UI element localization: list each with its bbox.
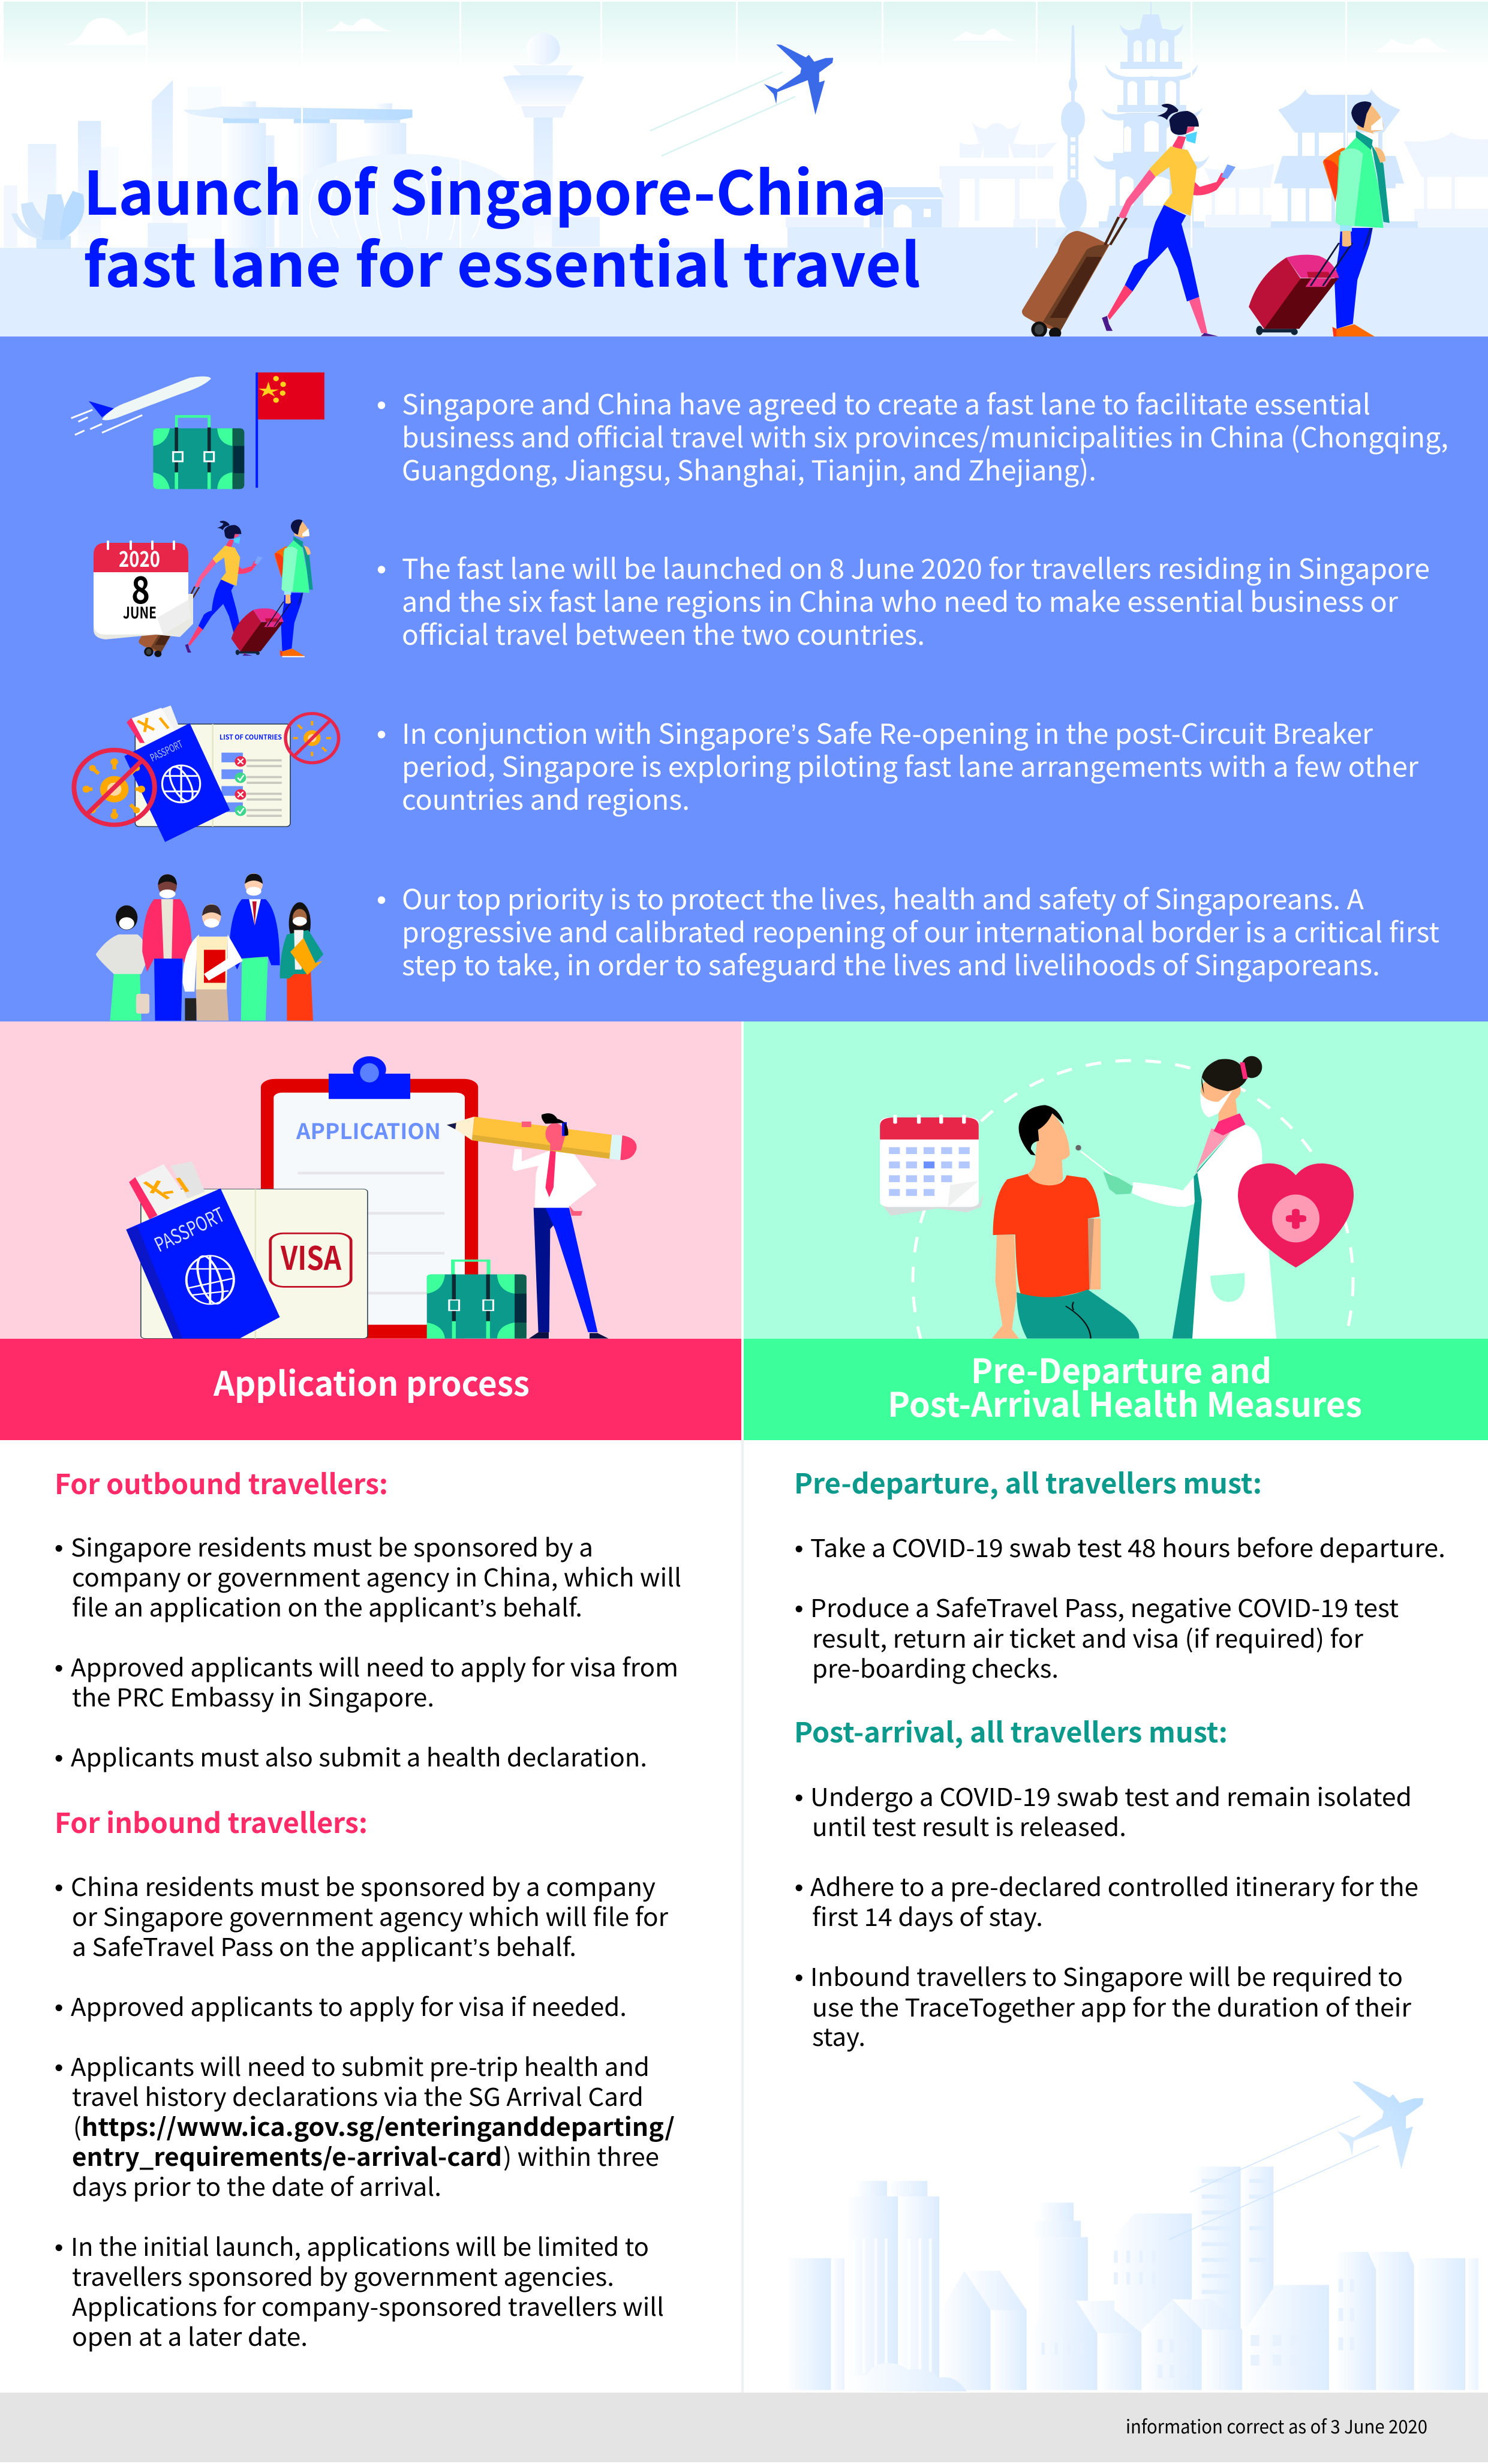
text: key point bullets: • [377,884,386,915]
inbound bullets: China residents must be sponsored by a company [71,1867,656,1903]
panel: application illustration: PASSPORT [149,1199,229,1258]
china skyline [786,0,1488,246]
outbound bullets: • [55,1744,63,1772]
title [83,145,921,304]
text: key point bullets: business and official travel with six provinces/municipalities in China (Chongqing, [402,416,1448,456]
inbound bullets: or Singapore government agency which will file for [72,1897,668,1933]
heading: Application process: Application process [213,1357,530,1406]
post-arrival bullets [795,1777,1418,2053]
faded city skyline with plane [784,2081,1478,2391]
header panel [0,0,1488,339]
post-arrival bullets: first 14 days of stay. [812,1897,1043,1933]
subheading: inbound: For inbound travellers: [55,1802,368,1841]
inbound bullets: days prior to the date of arrival. [72,2167,441,2203]
inbound bullets: • [55,1874,63,1901]
icon: calendar 8 June 2020 with travellers: JUNE [123,601,157,623]
outbound bullets: • [55,1534,63,1562]
pre-departure bullets: • [795,1535,803,1562]
text: key point bullets: period, Singapore is exploring piloting fast lane arrangements with a few other [402,746,1418,785]
heading: Pre-Departure and Post-Arrival Health Measures: Pre-Departure and [971,1345,1271,1393]
outbound bullets: Applicants must also submit a health declaration. [71,1738,647,1774]
icon: blue plane [650,44,833,156]
inbound bullets: travellers sponsored by government agencies. [72,2257,614,2293]
inbound bullets: • [55,2054,63,2081]
text: application process left column [55,1463,681,2353]
inbound bullets [55,1867,675,2353]
heading: Application process [0,1339,741,1440]
text: key point bullets [377,383,1448,984]
text: key point bullets: official travel between the two countries. [402,614,925,653]
title: Launch of Singapore-China [83,145,887,232]
clouds [62,18,1452,52]
post-arrival bullets: stay. [812,2017,865,2053]
icon: plane, suitcase and China flag [71,372,324,489]
post-arrival bullets: use the TraceTogether app for the duration of their [812,1988,1411,2024]
icon: calendar 8 June 2020 with travellers [94,519,313,657]
heading: Pre-Departure and Post-Arrival Health Measures [744,1339,1488,1440]
pre-departure bullets: pre-boarding checks. [812,1649,1059,1685]
panel: application illustration [0,1021,741,1339]
pre-departure bullets: • [795,1595,803,1622]
panel: key points: PASSPORT [147,736,185,764]
panel: key points: LIST OF COUNTRIES [220,732,282,742]
pre-departure bullets: Take a COVID-19 swab test 48 hours before departure. [810,1528,1445,1564]
post-arrival bullets: • [795,1874,803,1901]
outbound bullets: Approved applicants will need to apply for visa from [71,1648,678,1684]
inbound bullets: • [55,1994,63,2021]
text: key point bullets: • [377,389,386,420]
subheading: post-arrival: Post-arrival, all travellers must: [794,1711,1228,1751]
singapore skyline [4,33,600,249]
text: health measures right column [794,1462,1445,2053]
outbound bullets [55,1528,681,1774]
subheading: outbound: For outbound travellers: [55,1463,388,1503]
text: key point bullets: countries and regions. [402,779,690,818]
post-arrival bullets: until test result is released. [812,1807,1126,1843]
inbound bullets: ( [73,2107,82,2143]
inbound bullets: entry_requirements/e-arrival-card [72,2137,502,2173]
text: key point bullets: and the six fast lane regions in China who need to make essential business or [402,581,1398,620]
inbound bullets: ) within three [503,2137,659,2173]
subheading: pre-departure: Pre-departure, all travellers must: [794,1462,1262,1502]
outbound bullets: company or government agency in China, which will [72,1558,681,1594]
text: key point bullets: step to take, in order to safeguard the lives and livelihoods of Singaporeans. [402,944,1380,984]
inbound bullets: a SafeTravel Pass on the applicant ’s behalf. [72,1927,576,1963]
inbound bullets: open at a later date. [72,2317,308,2353]
title: fast lane for essential travel [83,217,921,304]
post-arrival bullets: Inbound travellers to Singapore will be required to [810,1957,1403,1993]
icon: passport, list of countries and no-virus signs [74,705,339,842]
inbound bullets: Applications for company-sponsored travellers will [72,2287,664,2323]
inbound bullets: Applicants will need to submit pre-trip health and [71,2047,650,2083]
outbound bullets: • [55,1654,63,1682]
heading: Pre-Departure and Post-Arrival Health Measures: Post-Arrival Health Measures [888,1378,1362,1427]
outbound bullets: the PRC Embassy in Singapore. [72,1678,434,1714]
icon: calendar 8 June 2020 with travellers: 2020 [119,542,160,573]
panel: key points [0,336,1488,1021]
inbound bullets: In the initial launch, applications will be limited to [71,2227,649,2263]
pre-departure bullets: Produce a SafeTravel Pass, negative COVID-19 test [810,1588,1399,1624]
icon: calendar 8 June 2020 with travellers: 8 [131,560,150,614]
text: key point bullets: • [377,719,386,750]
text: key point bullets: • [377,554,386,585]
inbound bullets: Approved applicants to apply for visa if needed. [71,1987,627,2023]
inbound bullets: travel history declarations via the SG Arrival Card [72,2077,644,2113]
post-arrival bullets: Undergo a COVID-19 swab test and remain isolated [810,1777,1412,1813]
pre-departure bullets [795,1528,1445,1685]
outbound bullets: file an application on the applicant ’s behalf. [72,1588,582,1624]
inbound bullets: https://www.ica.gov.sg/enteringanddeparting/ [82,2107,675,2143]
text: key point bullets: progressive and calibrated reopening of our international border is a critical first [402,911,1439,951]
post-arrival bullets: Adhere to a pre-declared controlled itinerary for the [810,1867,1418,1903]
text: key point bullets: Guangdong, Jiangsu, Shanghai, Tianjin, and Zhejiang). [402,449,1096,489]
outbound bullets: Singapore residents must be sponsored by a [71,1528,593,1564]
inbound bullets: • [55,2234,63,2261]
panel: application illustration: VISA [280,1232,341,1279]
travellers: man with red suitcase [1249,101,1390,339]
window frame lines [0,0,1488,248]
footer [0,2393,1488,2462]
panel: application illustration: APPLICATION [296,1114,441,1146]
text: key point bullets: Singapore and China have agreed to create a fast lane to facilitate essential [402,383,1370,423]
icon: group of masked people [96,873,323,1021]
post-arrival bullets: • [795,1964,803,1991]
pre-departure bullets: result, return air ticket and visa (if required) for [812,1619,1363,1655]
post-arrival bullets: • [795,1784,803,1811]
text: key point bullets: Our top priority is to protect the lives, health and safety of Singaporeans. A [402,878,1364,918]
footer: information correct as of 3 June 2020 [1126,2412,1427,2439]
text: key point bullets: The fast lane will be launched on 8 June 2020 for travellers residing in Singapore [402,548,1430,587]
travellers: woman with brown suitcase [1022,104,1236,339]
text: key point bullets: In conjunction with Singapore’s Safe Re-opening in the post-Circuit Breaker [402,713,1373,752]
panel: health illustration [744,1021,1488,1339]
